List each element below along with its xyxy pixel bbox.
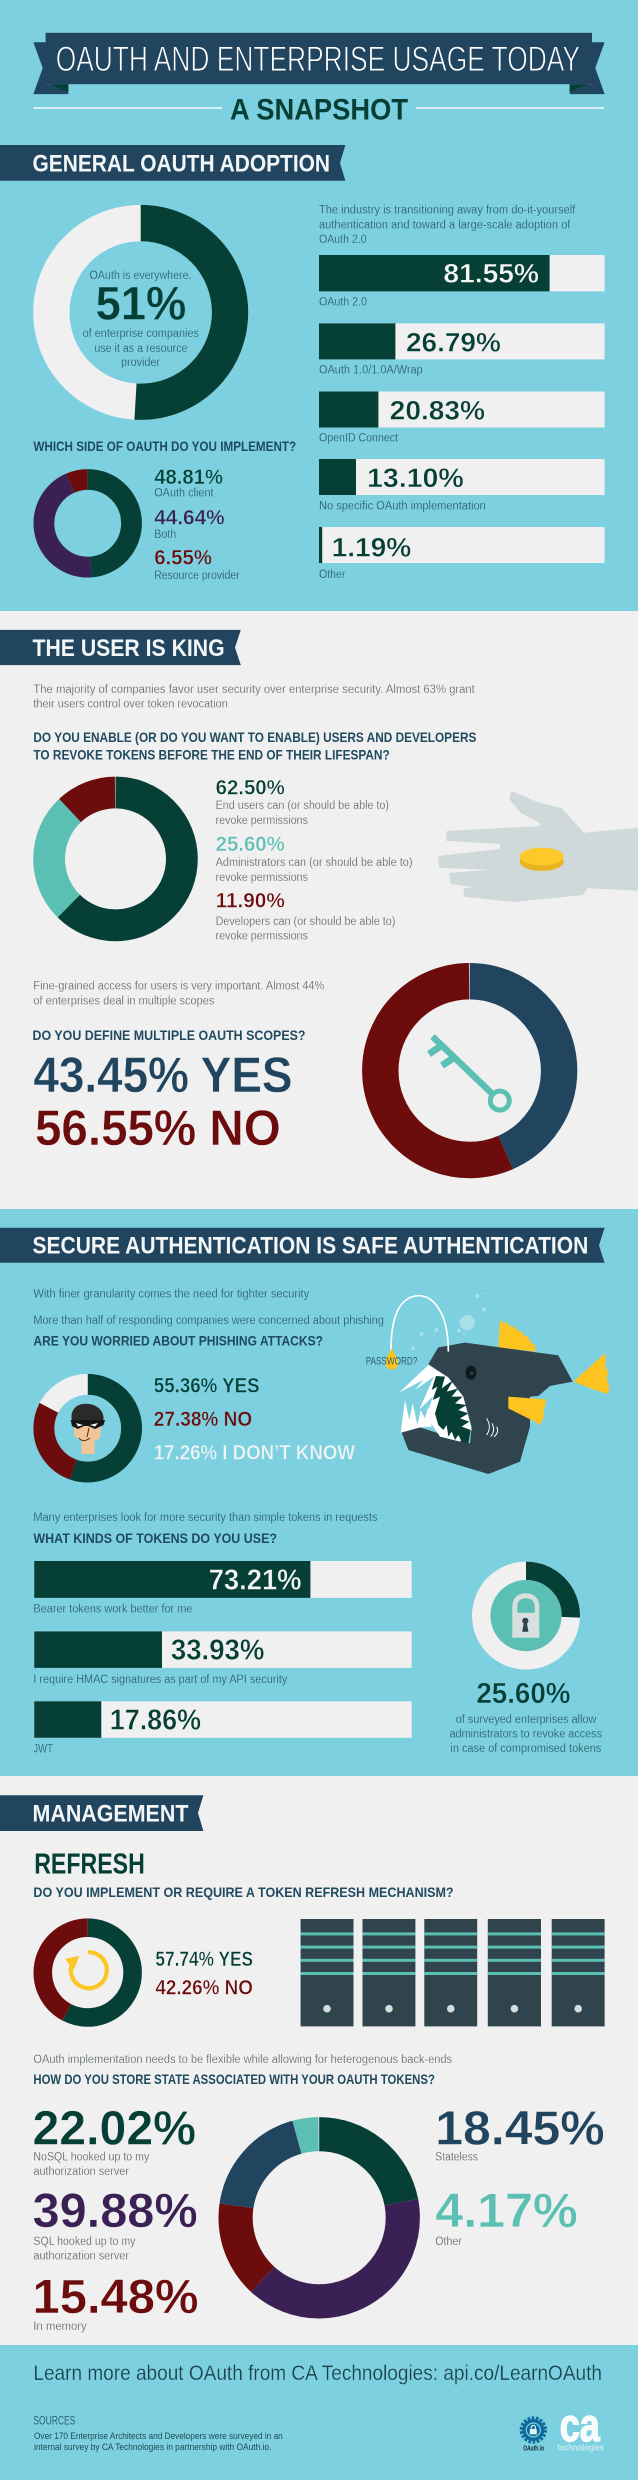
bar: OpenID Connect: OpenID Connect xyxy=(319,433,399,445)
legend: refresh xyxy=(155,1948,253,2000)
sources: Over 170 Enterprise Architects and Developers were surveyed in an xyxy=(34,2431,283,2442)
donut chart: revoke tokens xyxy=(49,792,182,925)
stat: NoSQL: NoSQL hooked up to my xyxy=(33,2152,150,2164)
donut chart: phishing xyxy=(44,1384,132,1472)
legend: which side: 48.81% xyxy=(154,465,223,489)
icon: anglerfish xyxy=(385,1292,609,1474)
bar: OAuth 1.0: 26.79% xyxy=(406,328,501,358)
legend: revoke tokens: Administrators can (or should be able to) xyxy=(216,857,413,869)
icon: masked thief face xyxy=(71,1404,105,1454)
logo: OAuth.io xyxy=(521,2418,545,2453)
legend: which side: 6.55% xyxy=(154,546,212,570)
donut chart: state storage xyxy=(236,2134,403,2301)
intro text: OAuth 2.0 xyxy=(319,234,367,246)
panel: secure authentication xyxy=(0,1209,638,1776)
legend: which side: 44.64% xyxy=(154,506,225,530)
bar: OpenID Connect: 20.83% xyxy=(390,396,485,426)
legend: revoke tokens: 25.60% xyxy=(216,833,285,856)
stat: in memory: 15.48% xyxy=(32,2271,198,2324)
legend: refresh: 42.26% NO xyxy=(155,1977,253,2000)
donut chart: scopes xyxy=(380,981,559,1160)
anglerfish lure label: PASSWORD? xyxy=(366,1356,417,1368)
legend: which side xyxy=(154,465,240,582)
legend: phishing: 17.26% I DON’T KNOW xyxy=(154,1441,355,1464)
bar: bearer tokens xyxy=(33,1561,412,1616)
intro text: phishing: With finer granularity comes the need for tighter security xyxy=(33,1288,309,1300)
legend: revoke tokens: revoke permissions xyxy=(216,872,308,884)
title banner xyxy=(33,33,605,94)
sources: SOURCES xyxy=(33,2416,76,2428)
intro text: tokens: Many enterprises look for more security than simple tokens in requests xyxy=(33,1512,378,1524)
question heading: revoke tokens: TO REVOKE TOKENS BEFORE THE END OF THEIR LIFESPAN? xyxy=(33,747,390,763)
donut chart: 51%: of enterprise companies xyxy=(83,328,199,340)
stat: other: Other xyxy=(435,2236,462,2248)
subtitle: A SNAPSHOT xyxy=(230,93,408,126)
section heading: the user is king: THE USER IS KING xyxy=(32,635,225,662)
bar: HMAC signatures: 33.93% xyxy=(171,1635,265,1667)
donut chart with lock icon xyxy=(472,1562,580,1670)
sources xyxy=(33,2416,283,2453)
bar: JWT: JWT xyxy=(33,1744,53,1756)
intro text: scopes: Fine-grained access for users is very important. Almost 44% xyxy=(33,981,324,993)
bar: OAuth 2.0 xyxy=(319,255,605,309)
intro text: their users control over token revocation xyxy=(33,699,228,711)
panel: the user is king xyxy=(0,611,638,1209)
section heading: management xyxy=(0,1795,203,1831)
bar: OpenID Connect xyxy=(319,392,605,445)
intro text: The majority of companies favor user security over enterprise security. Almost 63% grant xyxy=(33,684,476,696)
question heading: phishing: ARE YOU WORRIED ABOUT PHISHING ATTACKS? xyxy=(33,1332,323,1348)
sources: internal survey by CA Technologies in partnership with OAuth.io. xyxy=(34,2442,271,2453)
bar: OAuth 2.0: 81.55% xyxy=(443,259,539,289)
legend: which side: Resource provider xyxy=(154,570,240,582)
stat: SQL: SQL hooked up to my xyxy=(33,2236,136,2248)
stat: other: 4.17% xyxy=(435,2185,578,2238)
question heading: which side: WHICH SIDE OF OAUTH DO YOU IMPLEMENT? xyxy=(33,438,296,454)
icon: key xyxy=(429,1036,509,1110)
intro text: scopes xyxy=(33,981,324,1008)
legend: revoke tokens: Developers can (or should be able to) xyxy=(216,916,396,928)
stat: SQL xyxy=(32,2185,198,2263)
icon: refresh arrow xyxy=(65,1952,107,1988)
stat: 25.60%: 25.60% xyxy=(476,1678,571,1710)
legend: phishing: 27.38% NO xyxy=(154,1408,252,1431)
stat: 25.60%: in case of compromised tokens xyxy=(450,1743,602,1755)
bar: HMAC signatures xyxy=(33,1631,412,1686)
logo: CA Technologies: technologies xyxy=(557,2443,604,2453)
stat: stateless: 18.45% xyxy=(435,2102,605,2155)
subheading: refresh: REFRESH xyxy=(34,1849,145,1881)
section heading: management: MANAGEMENT xyxy=(32,1801,189,1828)
legend: refresh: 57.74% YES xyxy=(155,1948,253,1971)
logo: CA Technologies: ca xyxy=(560,2399,600,2451)
legend: which side: Both xyxy=(154,529,176,541)
legend: revoke tokens xyxy=(216,776,413,942)
intro text xyxy=(33,684,476,711)
panel: management xyxy=(0,1776,638,2345)
donut chart: 51%: provider xyxy=(121,357,160,369)
intro text: phishing: More than half of responding companies were concerned about phishing xyxy=(33,1315,384,1327)
stat: NoSQL: authorization server xyxy=(33,2166,129,2178)
legend: revoke tokens: 62.50% xyxy=(216,776,285,800)
icon: hand holding coin xyxy=(438,791,638,902)
stat: 25.60%: administrators to revoke access xyxy=(450,1728,602,1740)
legend: revoke tokens: 11.90% xyxy=(216,889,285,912)
section heading: general oauth adoption: GENERAL OAUTH ADOPTION xyxy=(32,151,330,178)
intro text: The industry is transitioning away from do-it-yourself xyxy=(319,204,576,216)
question heading: revoke tokens: DO YOU ENABLE (OR DO YOU WANT TO ENABLE) USERS AND DEVELOPERS xyxy=(33,729,476,745)
stat: SQL: authorization server xyxy=(33,2251,129,2263)
bar: other: 1.19% xyxy=(332,532,411,562)
bar: OAuth 1.0: OAuth 1.0/1.0A/Wrap xyxy=(319,365,423,377)
donut chart: refresh xyxy=(43,1928,133,2018)
stat: SQL: 39.88% xyxy=(32,2185,198,2238)
legend: revoke tokens: revoke permissions xyxy=(216,815,308,827)
bar: no specific implementation: No specific OAuth implementation xyxy=(319,501,486,513)
section heading: the user is king xyxy=(0,630,241,665)
bar: HMAC signatures: I require HMAC signatures as part of my API security xyxy=(33,1674,287,1686)
legend: revoke tokens: revoke permissions xyxy=(216,930,308,942)
stat: NoSQL xyxy=(32,2102,196,2178)
intro text xyxy=(319,204,576,246)
bar: OAuth 1.0 xyxy=(319,323,605,377)
intro text: authentication and toward a large-scale adoption of xyxy=(319,220,571,232)
bar: JWT xyxy=(33,1701,412,1756)
bar: bearer tokens: 73.21% xyxy=(209,1565,302,1597)
legend: phishing: 55.36% YES xyxy=(154,1374,260,1398)
section heading: general oauth adoption xyxy=(0,145,345,181)
bar: OAuth 2.0: OAuth 2.0 xyxy=(319,297,367,309)
question heading: revoke tokens xyxy=(33,729,476,763)
bar: JWT: 17.86% xyxy=(110,1705,201,1737)
stat: no: 56.55% NO xyxy=(35,1100,281,1156)
donut chart: which side xyxy=(44,480,131,567)
bar: other xyxy=(319,527,605,581)
donut chart: 51% xyxy=(51,223,230,402)
stat: NoSQL: 22.02% xyxy=(32,2102,196,2155)
logo: OAuth.io: OAuth.io xyxy=(523,2446,544,2453)
stat: in memory: In memory xyxy=(33,2321,87,2333)
stat: 25.60% xyxy=(450,1678,602,1755)
bar: no specific implementation: 13.10% xyxy=(367,463,464,493)
panel: footer xyxy=(0,2345,638,2480)
legend: which side: OAuth client xyxy=(154,488,214,500)
question heading: scopes: DO YOU DEFINE MULTIPLE OAUTH SCOPES? xyxy=(32,1027,306,1043)
question heading: refresh: DO YOU IMPLEMENT OR REQUIRE A TOKEN REFRESH MECHANISM? xyxy=(33,1884,454,1900)
panel: header and general oauth adoption xyxy=(0,0,638,611)
icon: servers xyxy=(301,1919,605,2026)
intro text: state storage: OAuth implementation needs to be flexible while allowing for heterogenous back-ends xyxy=(33,2054,452,2066)
question heading: tokens: WHAT KINDS OF TOKENS DO YOU USE? xyxy=(33,1530,277,1546)
donut chart: 51%: OAuth is everywhere. xyxy=(90,270,192,282)
legend: revoke tokens: End users can (or should be able to) xyxy=(216,800,389,812)
bar: no specific implementation xyxy=(319,459,605,513)
stat: yes: 43.45% YES xyxy=(33,1047,293,1103)
donut chart: 51%: 51% xyxy=(96,278,186,330)
stat: 25.60%: of surveyed enterprises allow xyxy=(456,1714,597,1726)
bar: bearer tokens: Bearer tokens work better for me xyxy=(33,1604,192,1616)
question heading: state storage: HOW DO YOU STORE STATE ASSOCIATED WITH YOUR OAUTH TOKENS? xyxy=(33,2071,435,2087)
bar: other: Other xyxy=(319,569,346,581)
intro text: scopes: of enterprises deal in multiple scopes xyxy=(33,996,215,1008)
stat: stateless: Stateless xyxy=(435,2152,478,2164)
donut chart: 51%: use it as a resource xyxy=(94,343,188,355)
intro text: phishing xyxy=(33,1288,384,1327)
legend: phishing xyxy=(154,1374,355,1464)
